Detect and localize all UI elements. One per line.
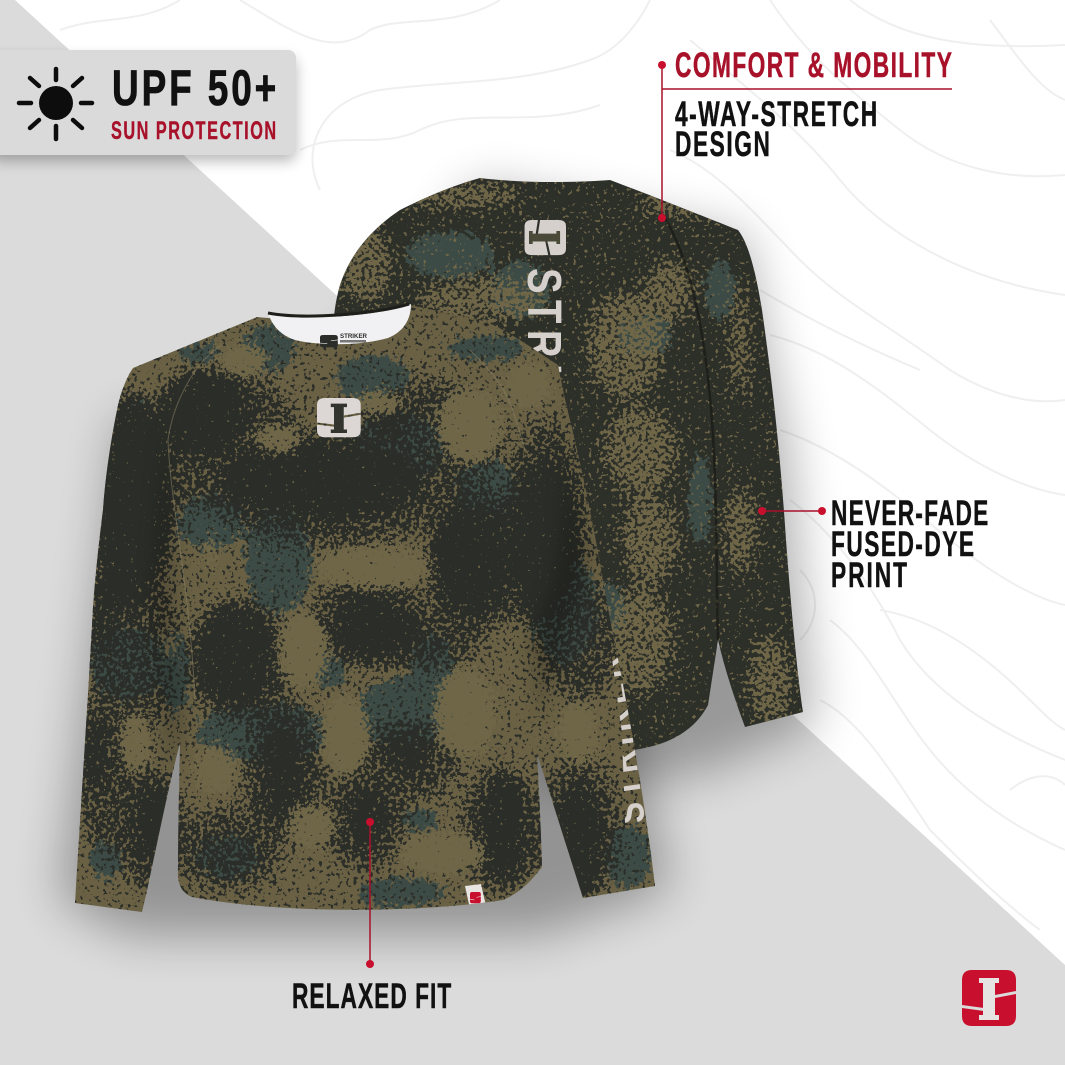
badge: UPF 50+ sun protection: [0, 50, 296, 161]
vertical brand text on back: STRIKER: [517, 268, 570, 481]
callout: relaxed fit: [292, 818, 451, 1016]
sleeve brand text: STRIKER: [585, 648, 654, 827]
chest logo: [317, 398, 361, 437]
callout: never-fade print: NEVER-FADE: [831, 494, 988, 533]
callout: never-fade print: [758, 494, 988, 595]
front seams: [168, 345, 525, 700]
back logo: [525, 220, 566, 255]
front view shirt: [68, 300, 670, 920]
brand logo: [962, 970, 1016, 1026]
callout: never-fade print: PRINT: [831, 556, 907, 595]
back view shirt: [320, 170, 820, 770]
speckled dark halos: [68, 368, 622, 902]
callout: never-fade print: FUSED-DYE: [831, 525, 974, 564]
badge subheading: SUN PROTECTION: [111, 118, 276, 145]
shirt shadows: [60, 185, 815, 935]
camouflage: lighter olive patches: [119, 343, 600, 875]
icon: sun: [19, 69, 92, 139]
collar and inner neck label: STRIKER: [340, 334, 368, 340]
back seams: [665, 218, 718, 640]
solid dark cores: [159, 371, 247, 455]
callout: comfort and mobility: 4-WAY-STRETCH: [675, 95, 877, 134]
camouflage: teal patches: [405, 231, 736, 640]
callout: comfort and mobility: COMFORT & MOBILITY: [675, 46, 952, 85]
fold shading: [148, 474, 591, 754]
callout: comfort and mobility: [658, 46, 952, 222]
camouflage: dark patches: [68, 300, 670, 920]
camouflage: teal patches: [88, 324, 652, 907]
callout: relaxed fit: RELAXED FIT: [292, 977, 451, 1016]
callout: comfort and mobility: DESIGN: [675, 125, 770, 164]
camouflage: olive speckled patches: [334, 178, 802, 748]
collar and inner neck label: [268, 304, 411, 347]
badge heading: UPF 50+: [112, 61, 276, 116]
hem tag: [465, 884, 486, 904]
